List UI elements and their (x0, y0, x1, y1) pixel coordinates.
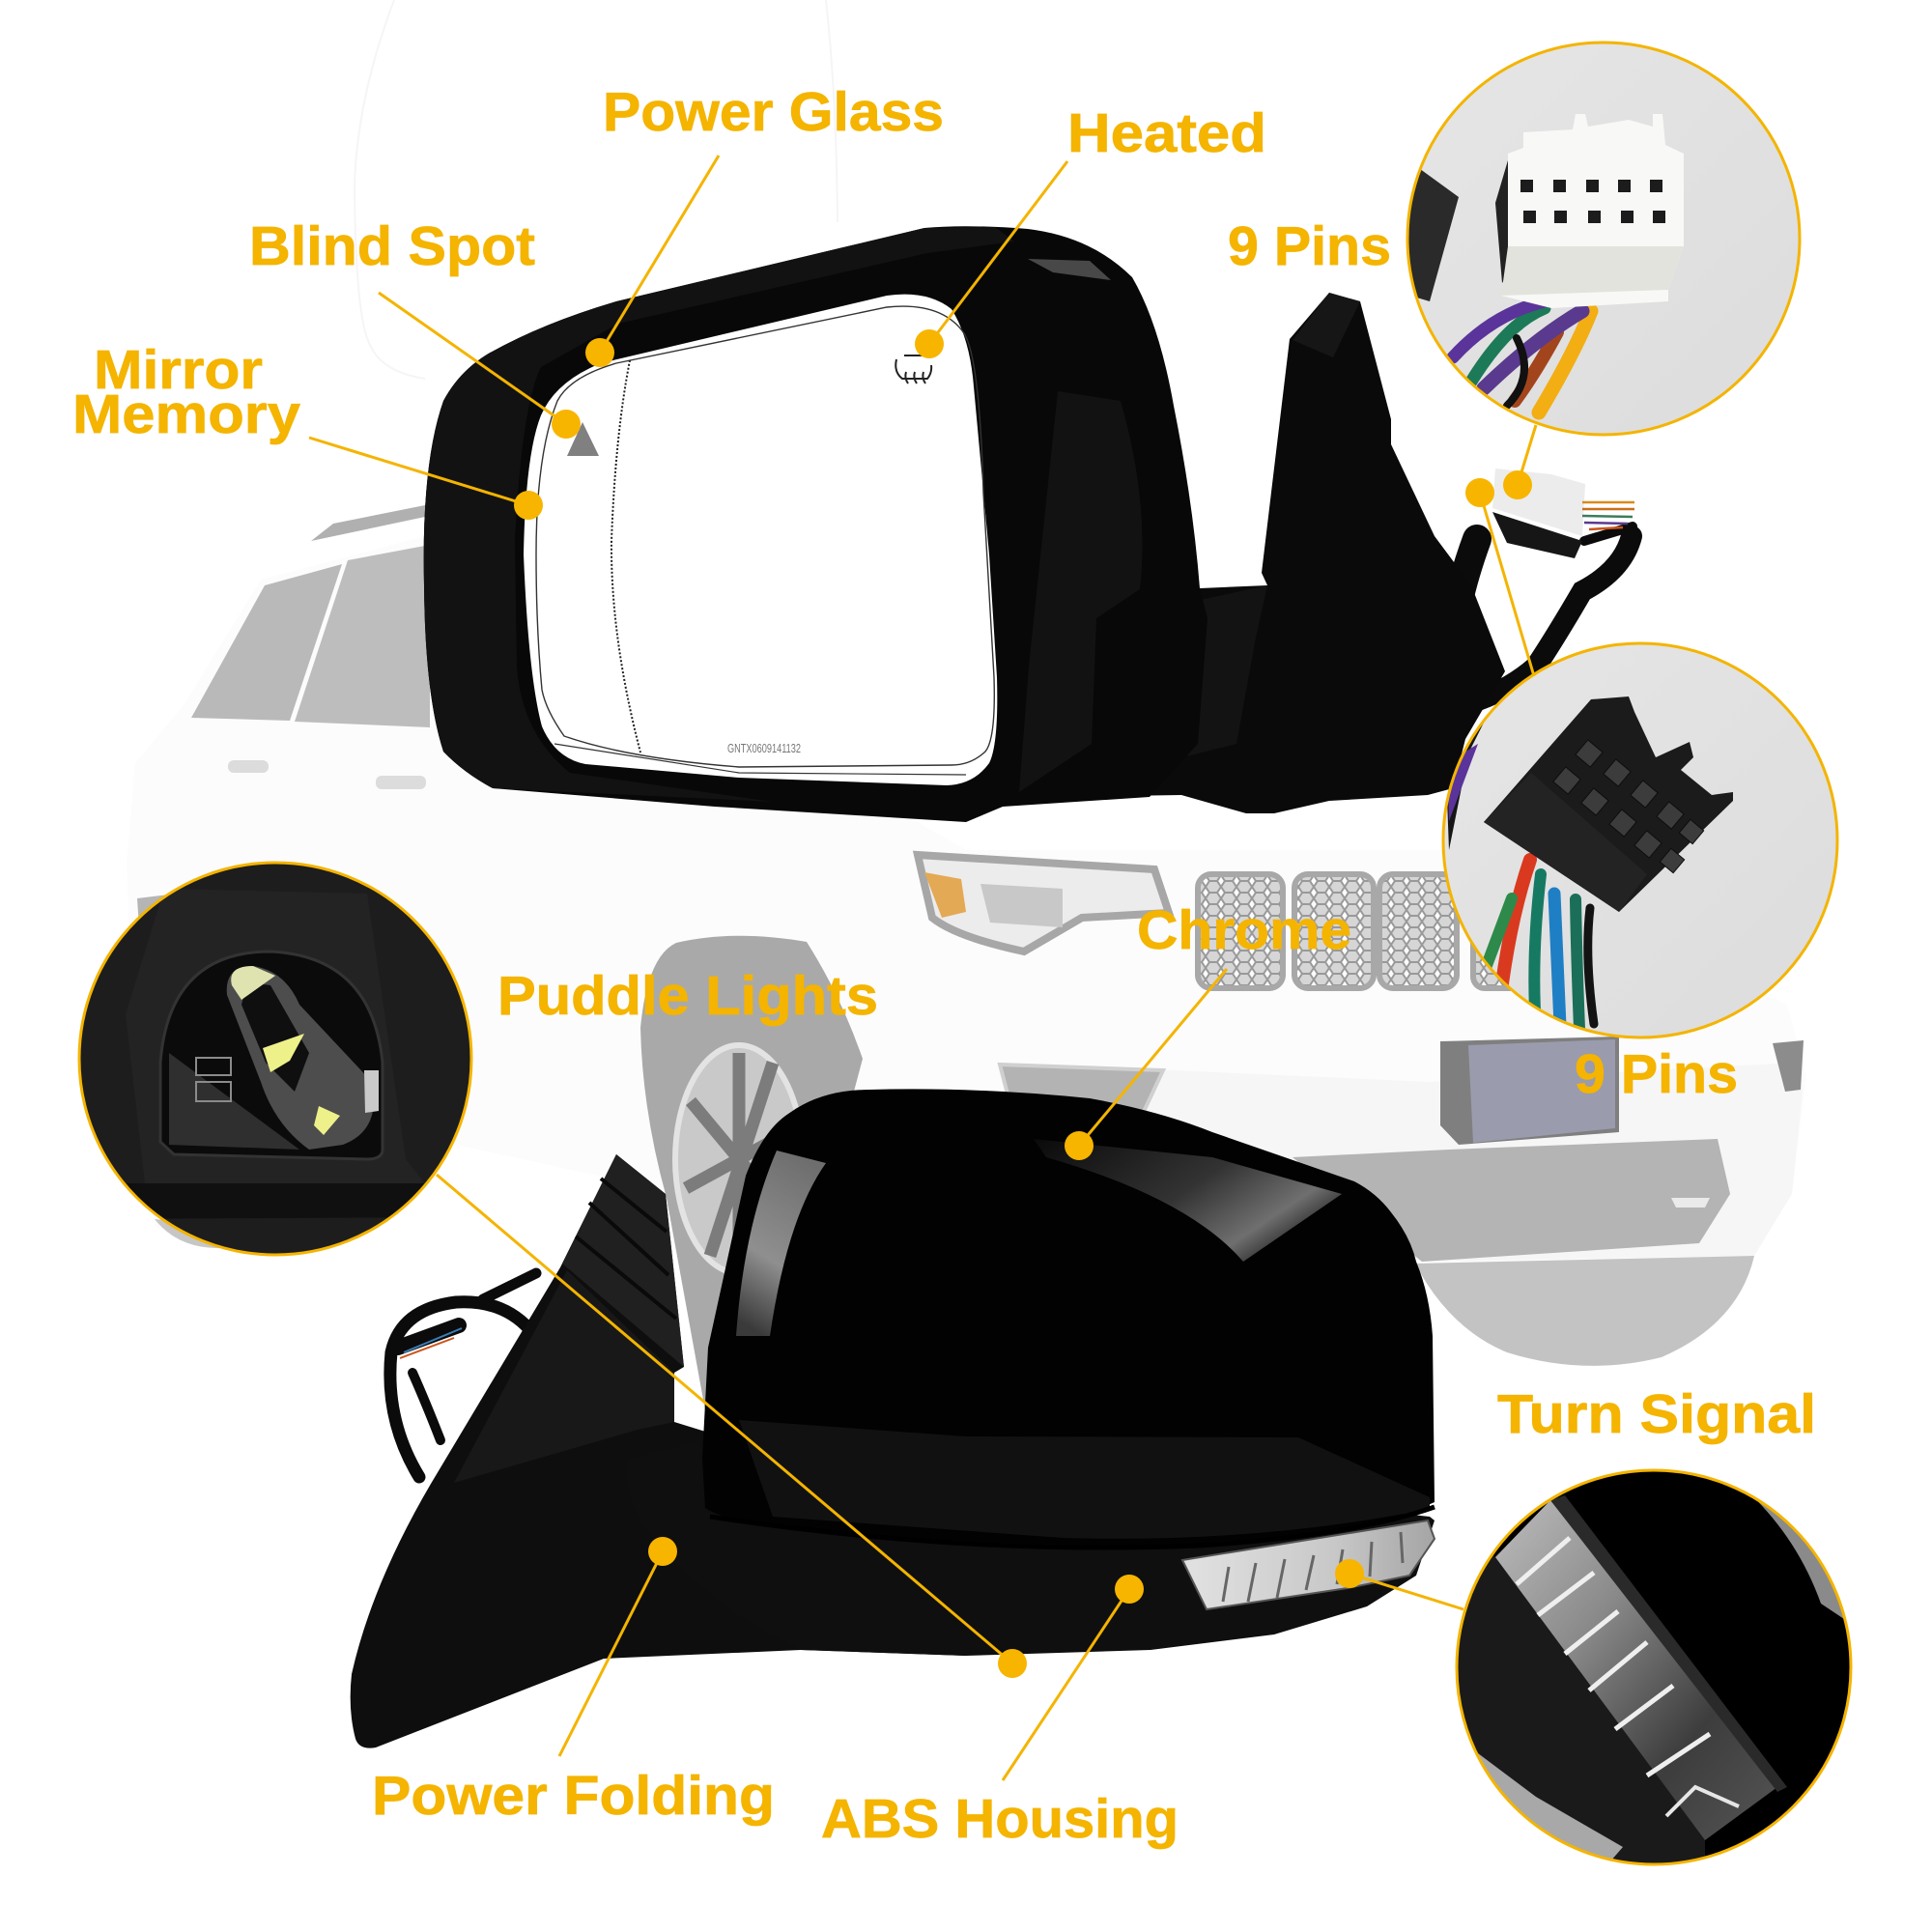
dotted viewing line (611, 360, 640, 753)
LED highlights (263, 1034, 304, 1072)
car front shading (1005, 1063, 1803, 1262)
part number: GNTX0609141132 (727, 742, 801, 755)
strip ridges (1517, 1538, 1710, 1776)
callout: ABS Housing (821, 1575, 1179, 1850)
frame rim (424, 227, 1014, 802)
arm and base (1063, 293, 1505, 813)
shell gloss (1028, 259, 1111, 280)
blind spot triangle (567, 422, 599, 456)
upper connector wires (1582, 502, 1634, 529)
callout: Blind Spot: Blind Spot (249, 215, 535, 277)
callout: 9 Pins (white connector) (1228, 215, 1536, 499)
callout: Turn Signal (1335, 1383, 1816, 1609)
callout: 9 Pins (white connector): 9 Pins (1228, 215, 1391, 277)
car body (127, 536, 1806, 1285)
callout: Puddle Lights: Puddle Lights (497, 965, 878, 1027)
detail circle: black 9-pin connector (1439, 638, 1845, 1043)
license plate (1440, 1037, 1619, 1145)
wheel arch (640, 936, 863, 1410)
side marker (137, 895, 169, 942)
lower bumper intake (1293, 1139, 1730, 1262)
callout: Power Folding: Power Folding (372, 1765, 775, 1827)
base highlights (454, 1270, 674, 1483)
shell top highlight (1034, 1139, 1342, 1262)
upper connector (1492, 512, 1582, 558)
shell (702, 1089, 1435, 1546)
arm top face (1293, 293, 1360, 357)
wheel rim (675, 1045, 803, 1273)
front tyre (1415, 1256, 1754, 1366)
callout: 9 Pins (black connector) (1465, 478, 1738, 1105)
connector body (1501, 114, 1684, 308)
callout: Blind Spot (249, 215, 581, 439)
glass (524, 295, 997, 785)
lamp window (160, 952, 383, 1159)
glass inner outline (536, 306, 994, 767)
callout: Mirror Memory: Memory (72, 384, 300, 445)
left dark connector (1408, 170, 1459, 301)
strip (1495, 1500, 1777, 1840)
connector pin holes (1520, 180, 1665, 223)
door handles (228, 760, 426, 789)
background car (ghosted SUV) (127, 0, 1806, 1410)
callout: 9 Pins (black connector): 9 Pins (1575, 1043, 1738, 1105)
wires (1453, 301, 1591, 412)
callout: Power Folding (372, 1537, 775, 1827)
callout: Heated: Heated (1067, 102, 1266, 164)
headlight (918, 855, 1169, 952)
heated icon (895, 355, 931, 384)
tow hook (1671, 1198, 1710, 1208)
callout: Chrome: Chrome (1137, 899, 1351, 961)
light reflection (1478, 1753, 1623, 1859)
circuit marks (196, 1058, 231, 1101)
front-left tyre (155, 1219, 242, 1248)
callout: Chrome (1065, 899, 1351, 1160)
lower housing (627, 1439, 1435, 1656)
shell lower panel (739, 1420, 1430, 1539)
window rear (295, 545, 430, 727)
callout: Power Glass: Power Glass (603, 81, 944, 143)
callout: Power Glass (585, 81, 944, 367)
wires (1483, 860, 1594, 1029)
detail circle: white 9-pin connector (1391, 39, 1806, 444)
mounting base and arm (351, 1154, 966, 1748)
callout: Mirror Memory: Mirror (94, 339, 263, 401)
matte lower housing (1459, 1555, 1705, 1862)
shell gloss (1758, 1501, 1843, 1619)
roof rail (311, 505, 425, 541)
turn signal strip (1182, 1520, 1435, 1609)
lens capsule (227, 966, 374, 1150)
callout: ABS Housing: ABS Housing (821, 1788, 1179, 1850)
stalk ridges (562, 1154, 684, 1367)
connector body (1484, 696, 1733, 912)
grille slots (1198, 874, 1521, 988)
shell lower panel (1019, 391, 1142, 792)
callout: Turn Signal: Turn Signal (1497, 1383, 1816, 1445)
right marker light (1773, 1040, 1804, 1092)
callout: Mirror Memory (72, 339, 543, 520)
connector pin holes (1553, 740, 1704, 873)
outer frame and shell (424, 226, 1208, 822)
callout: Heated (915, 102, 1266, 358)
trim line (710, 1507, 1435, 1548)
wire loop (390, 1273, 536, 1477)
lower mirror (rear shell view) (351, 1089, 1435, 1748)
detail circle: puddle light (77, 860, 473, 1261)
wiring harness (1454, 526, 1633, 700)
detail circle: turn signal (1454, 1468, 1855, 1869)
window front (191, 564, 342, 721)
callout: Puddle Lights (437, 965, 1027, 1678)
upper mirror (mirror glass side view) (424, 226, 1634, 822)
fog light inset (1000, 1065, 1163, 1116)
harness piece (1447, 723, 1484, 850)
folding stalk (1094, 585, 1267, 763)
shell left highlight (736, 1151, 826, 1336)
connector dark side (1495, 160, 1508, 283)
